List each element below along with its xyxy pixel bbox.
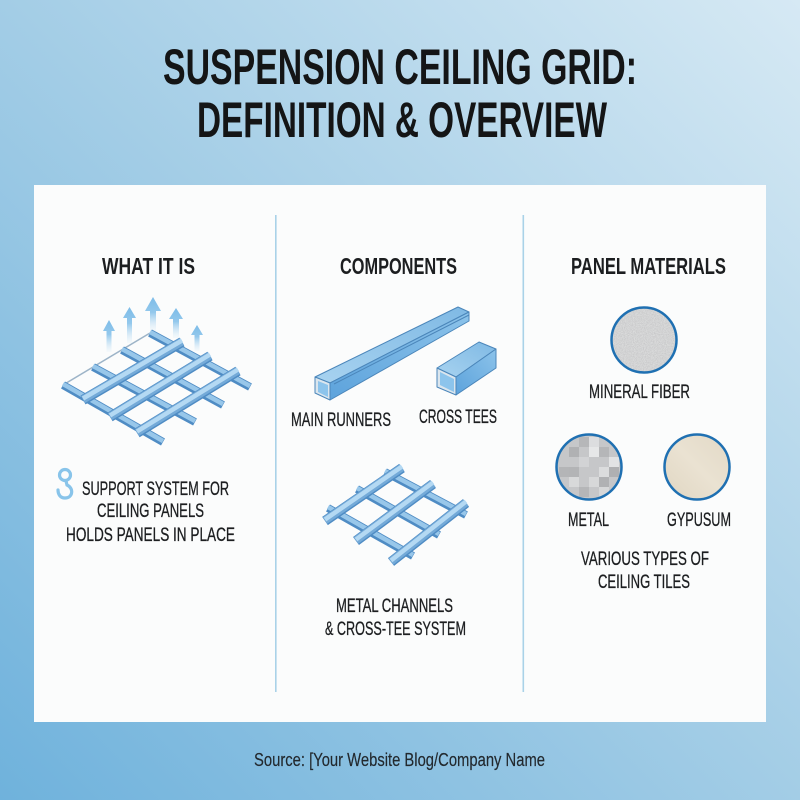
label: mineral fiber: MINERAL FIBER: [589, 382, 690, 403]
title: DEFINITION & OVERVIEW: [197, 92, 608, 148]
text: materials caption: CEILING TILES: [598, 572, 690, 593]
text: description: SUPPORT SYSTEM FOR: [82, 479, 229, 500]
icon: ceiling grid: [63, 332, 250, 442]
heading: components: COMPONENTS: [340, 253, 457, 279]
panel: panel materials: [556, 253, 731, 593]
text: description: [66, 479, 235, 546]
panel: what it is: [58, 253, 250, 546]
icon: hook: [58, 470, 72, 498]
icon: upward arrows: [103, 297, 203, 352]
main white panel: [34, 185, 766, 722]
icon: assembled grid: [325, 466, 466, 562]
text: materials caption: VARIOUS TYPES OF: [581, 549, 709, 570]
label: metal: METAL: [568, 510, 609, 531]
text: description: HOLDS PANELS IN PLACE: [66, 525, 235, 546]
source line: Source: [Your Website Blog/Company Name: [254, 749, 545, 770]
panel: components: [291, 253, 497, 640]
icon: main runner: [315, 307, 469, 400]
text: materials caption: [581, 549, 709, 593]
label: main runners: MAIN RUNNERS: [291, 410, 391, 431]
heading: what it is: WHAT IT IS: [102, 253, 195, 279]
heading: panel materials: PANEL MATERIALS: [571, 253, 726, 279]
label: cross tees: CROSS TEES: [419, 407, 497, 428]
text: channels caption: METAL CHANNELS: [336, 596, 453, 617]
swatch: mineral fiber: [612, 308, 676, 372]
text: channels caption: & CROSS-TEE SYSTEM: [325, 619, 466, 640]
icon: cross tee: [437, 342, 496, 395]
label: gypsum: GYPUSUM: [667, 510, 731, 531]
swatch: gypsum: [664, 434, 730, 500]
swatch: metal: [556, 434, 622, 500]
title: [163, 39, 637, 148]
text: channels caption: [325, 596, 466, 640]
text: description: CEILING PANELS: [97, 501, 204, 522]
